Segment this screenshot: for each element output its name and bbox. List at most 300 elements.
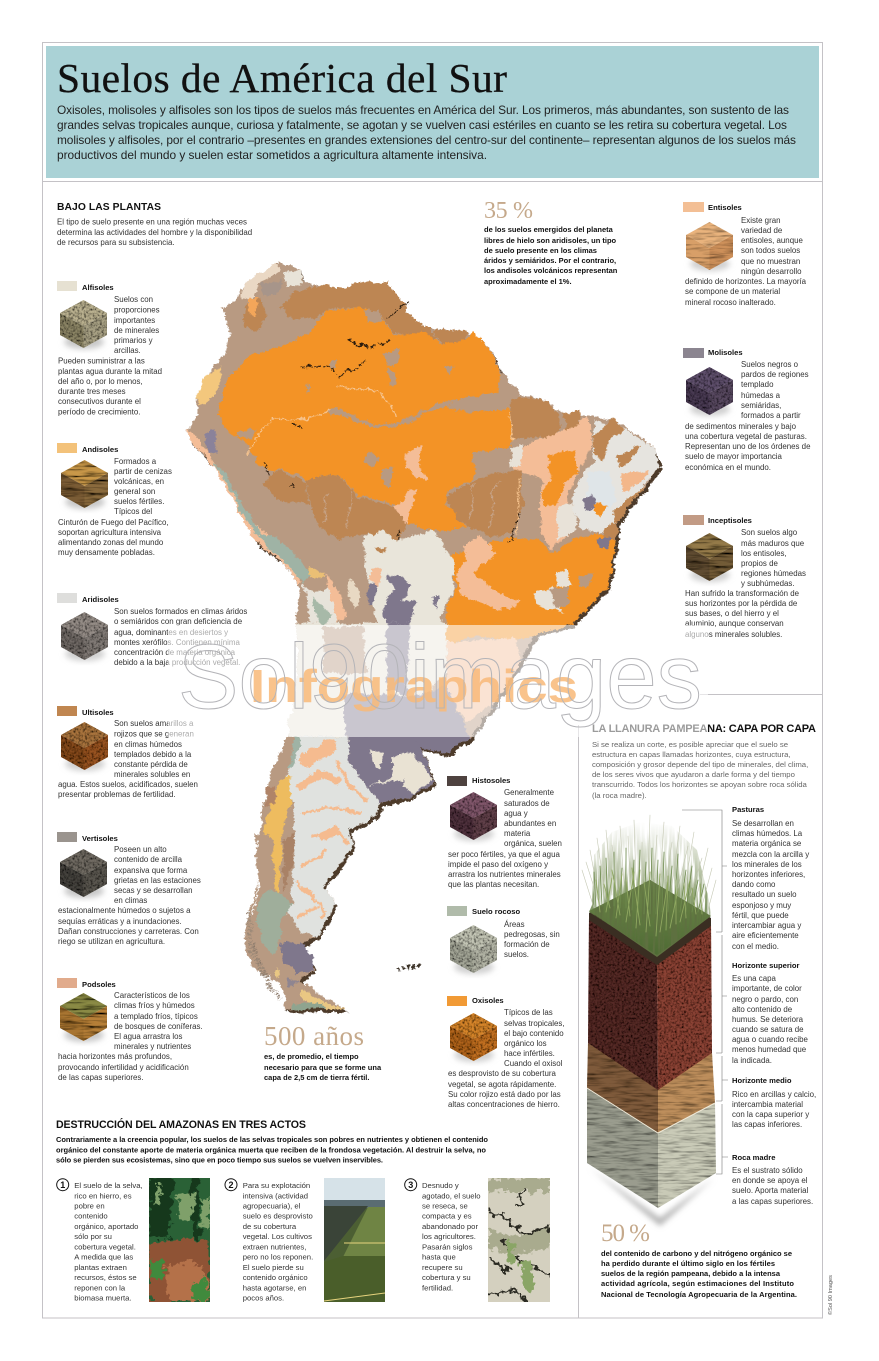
soil: podsoles: Podsoles <box>82 980 116 989</box>
section: destrucción del Amazonas: sólo se pierden sus ecosistemas, sino que en poco tiempo sus suelos se vuelven inservibles. <box>56 1156 383 1164</box>
step 2: pocos años. <box>243 1294 284 1302</box>
section: llanura pampeana: LA LLANURA PAMPEANA: CAPA POR CAPA <box>592 723 816 735</box>
soil: podsoles: de las capas superiores. <box>58 1073 144 1082</box>
soil: molisoles: Representan uno de los órdenes de <box>685 442 811 451</box>
soil: entisoles: que no muestran <box>741 257 800 266</box>
soil: vertisoles: grietas en las estaciones <box>114 876 201 885</box>
step 2: extraen nutrientes, <box>243 1242 306 1251</box>
soil: inceptisoles: algunos minerales solubles. <box>685 630 782 639</box>
layer: pasturas: Pasturas <box>732 805 764 814</box>
step 3: los agricultores. <box>422 1232 476 1241</box>
layer: horizonte superior: importante, de color <box>732 984 802 993</box>
coastal entisoles and rocky strip <box>187 430 300 587</box>
layer: pasturas: fértil, que puede <box>732 911 789 920</box>
soil: aridisoles: Son suelos formados en climas áridos <box>114 607 247 616</box>
soil: podsoles: minerales y nutrientes <box>114 1042 191 1051</box>
oxisoles south-east area <box>447 533 617 625</box>
step 2: contenido orgánico <box>243 1273 308 1282</box>
soil: andisoles: Formados a <box>114 457 157 466</box>
step 3: 3 <box>408 1180 413 1190</box>
soil: histosoles: ser poco fértiles, ya que el agua <box>448 850 560 859</box>
step 3: hasta que <box>422 1253 456 1262</box>
soil: oxisoles: orgánico los <box>504 1039 547 1048</box>
layer: horizonte medio: con la capa superior y <box>732 1110 809 1119</box>
subsoil layer <box>587 1043 715 1133</box>
soil: aridisoles: debido a la baja producción vegetal. <box>114 658 240 667</box>
soil: histosoles: abundantes en <box>504 819 556 828</box>
stat: 35 %: libres de hielo son aridisoles, un tipo <box>484 236 617 245</box>
soil: alfisoles: Alfisoles <box>82 283 114 292</box>
soil: oxisoles: hace infértiles. <box>504 1049 555 1058</box>
layer: horizonte medio: las capas inferiores. <box>732 1120 802 1129</box>
soil: entisoles: se compone de un material <box>685 287 780 296</box>
soil: andisoles <box>57 443 172 557</box>
rivers <box>248 303 520 543</box>
soil: alfisoles: durante tres meses <box>58 387 126 396</box>
layer: roca madre: suelo. Aporta material <box>732 1186 809 1195</box>
soil: molisoles: semiáridas, <box>741 401 781 410</box>
heading: bajo las plantas: determina las actividades del hombre y la disponibilidad <box>57 228 252 237</box>
soil: vertisoles: sequías erráticas y a inundaciones. <box>58 917 182 926</box>
soil: ultisoles: en climas húmedos <box>114 740 182 749</box>
step 2: Para su explotación <box>243 1181 310 1190</box>
cube: aridisoles <box>61 612 108 661</box>
stat: 35 %: 35 % <box>484 198 533 224</box>
section: llanura pampeana: transcurrido. Todos los horizontes se apoyan sobre roca sólida <box>592 780 808 789</box>
layer: pasturas: aire eficientemente <box>732 931 799 940</box>
cube: ultisoles <box>61 722 108 771</box>
soil: suelo rocoso: pedregosas, sin <box>504 930 560 939</box>
photo: cultivo <box>324 1178 385 1302</box>
step 1: plantas extraen <box>74 1263 127 1272</box>
soil: inceptisoles: regiones húmedas <box>741 569 806 578</box>
watermark: Sol90images: Sol90images <box>178 626 702 728</box>
soil: entisoles: Existe gran <box>741 216 780 225</box>
heading: bajo las plantas: BAJO LAS PLANTAS <box>57 202 161 213</box>
soil: suelo rocoso: formación de <box>504 940 550 949</box>
soil: andisoles: Típicos del <box>114 507 152 516</box>
map shadow <box>189 265 661 1013</box>
title: Suelos de América del Sur <box>57 55 507 101</box>
step 1: sólo por su <box>74 1232 112 1241</box>
step 1: rico en hierro, es <box>74 1191 132 1200</box>
soil: histosoles: Histosoles <box>472 776 510 785</box>
soil: oxisoles: Oxisoles <box>472 996 504 1005</box>
soil: inceptisoles: y subhúmedas. <box>741 579 795 588</box>
stat: 35 %: los andisoles volcánicos representan <box>484 266 618 275</box>
soil: ultisoles <box>57 706 198 799</box>
soil: entisoles: variedad de <box>741 226 783 235</box>
soil: molisoles <box>683 348 811 472</box>
soil: andisoles: alimentando zonas del mundo <box>58 538 164 547</box>
layer: roca madre: en donde se apoya el <box>732 1176 808 1185</box>
layer: horizonte superior: menos humedad que <box>732 1045 807 1054</box>
step 2: hasta agotarse, en <box>243 1283 306 1292</box>
soil: vertisoles: Vertisoles <box>82 834 118 843</box>
stat: 35 %: de los suelos emergidos del planeta <box>484 225 614 234</box>
soil: histosoles: materia <box>504 829 531 838</box>
layer: roca madre: a las capas superiores. <box>732 1197 813 1206</box>
soil: alfisoles: del año o, por lo menos, <box>58 377 143 386</box>
soil: alfisoles: arcillas. <box>114 346 141 355</box>
layer: pasturas: Se desarrollan en <box>732 819 794 828</box>
soil: podsoles: hacia horizontes más profundos, <box>58 1052 172 1061</box>
step 2 <box>225 1178 385 1302</box>
step 3: Desnudo y <box>422 1181 459 1190</box>
soil: alfisoles: primarios y <box>114 336 153 345</box>
ultisoles areas <box>243 282 560 542</box>
step 3: recupere su <box>422 1263 463 1272</box>
stone layer <box>587 1088 716 1208</box>
step 3 <box>405 1178 550 1302</box>
cube: alfisoles <box>60 300 107 349</box>
southern cone soils <box>248 623 573 1010</box>
soil: oxisoles <box>447 996 565 1109</box>
stat: 50 %: 50 % <box>601 1220 650 1247</box>
cube: oxisoles <box>450 1013 497 1062</box>
soil: histosoles: Generalmente <box>504 788 555 797</box>
soil: histosoles: saturados de <box>504 799 550 808</box>
soil: oxisoles: altas concentraciones de hierro. <box>448 1100 560 1109</box>
layer: horizonte medio <box>732 1076 816 1129</box>
soil: histosoles: que las plantas necesitan. <box>448 880 539 889</box>
soil: oxisoles: Su color rojizo está dado por las <box>448 1090 561 1099</box>
heading: bajo las plantas <box>57 202 252 247</box>
stat: 35 %: áridos y semiáridos. Por el contrario, <box>484 256 616 265</box>
soil: podsoles: Característicos de los <box>114 991 190 1000</box>
layer: horizonte medio: intercambia material <box>732 1100 803 1109</box>
step 3: compacta y es <box>422 1212 472 1221</box>
soil: inceptisoles: propios de <box>741 559 778 568</box>
soil: oxisoles: Típicos de las <box>504 1008 553 1017</box>
soil: vertisoles <box>57 832 201 946</box>
heading: bajo las plantas: El tipo de suelo presente en una región muchas veces <box>57 218 247 226</box>
soil: histosoles: orgánica, suelen <box>504 839 562 848</box>
soil: entisoles: definido de horizontes. La mayoría <box>685 277 807 286</box>
soil: andisoles: general son <box>114 487 155 496</box>
layer: horizonte superior: negro o pardo, con <box>732 995 798 1004</box>
soil: inceptisoles: aluminio, aunque conservan <box>685 619 784 628</box>
soil: ultisoles: Son suelos amarillos a <box>114 719 194 728</box>
step 1: El suelo de la selva, <box>74 1181 143 1190</box>
soil: oxisoles: el bajo contenido <box>504 1029 564 1038</box>
intro text: grandes selvas tropicales aunque, curiosa y fatalmente, se agotan y se vuelven casi estériles en cuanto se les retira su cobertura vegetal. Los <box>57 118 787 132</box>
layer: pasturas <box>732 805 809 951</box>
layer: horizonte medio: Horizonte medio <box>732 1076 792 1085</box>
soil: podsoles: a templado fríos, típicos <box>114 1012 198 1021</box>
section: destrucción del Amazonas: Contrariamente a la creencia popular, los suelos de las selvas tropicales son pobres en nutrientes y obtienen el contenido <box>56 1135 488 1144</box>
soil profile block <box>582 815 716 1226</box>
layer: roca madre <box>732 1153 813 1206</box>
layer: horizonte medio: Rico en arcillas y calcio, <box>732 1090 816 1099</box>
soil: alfisoles: consecutivos durante el <box>58 397 141 406</box>
soil: oxisoles: selvas tropicales, <box>504 1019 565 1028</box>
stat: 50 % <box>601 1220 797 1299</box>
step 2: agropecuaria), el <box>243 1202 301 1210</box>
soil: andisoles: Andisoles <box>82 445 118 454</box>
stat: 35 %: de suelo presente en los climas <box>484 246 597 255</box>
soil: entisoles: Entisoles <box>708 203 742 212</box>
step 1: pobre en <box>74 1202 105 1210</box>
layer: pasturas: esponjoso y muy <box>732 901 791 910</box>
layer: roca madre: Es el sustrato sólido <box>732 1166 803 1175</box>
soil: vertisoles: Dañan construcciones y carreteras. Con <box>58 927 199 936</box>
soil: entisoles: mineral rocoso inalterado. <box>685 298 776 307</box>
step 3: agotado, el suelo <box>422 1191 481 1200</box>
soil: molisoles: templado <box>741 380 774 389</box>
soil: ultisoles: constante pérdida de <box>114 760 188 769</box>
stat: 50 %: suelos de la región pampeana, debido a la intensa <box>601 1269 781 1278</box>
turf <box>589 880 711 965</box>
soil: histosoles <box>447 776 562 889</box>
soil: andisoles: soportan agricultura intensiva <box>58 528 162 537</box>
layer: pasturas: dando como <box>732 880 776 889</box>
soil: andisoles: Cinturón de Fuego del Pacífico, <box>58 518 169 527</box>
photo: suelo agrietado <box>488 1178 550 1302</box>
soil: ultisoles: minerales solubles en <box>114 770 190 779</box>
stat: 50 %: Nacional de Tecnología Agropecuaria de la Argentina. <box>601 1290 797 1299</box>
soil: inceptisoles: Inceptisoles <box>708 516 752 525</box>
soil: vertisoles: Poseen un alto <box>114 845 167 854</box>
soil: aridisoles: o semiáridos con gran deficiencia de <box>114 617 243 626</box>
soil: entisoles <box>683 202 807 307</box>
credit: ©Sol 90 Images <box>827 1275 834 1315</box>
soil: aridisoles: concentración de materia orgánica <box>114 648 236 657</box>
soil: molisoles: Suelos negros o <box>741 360 799 369</box>
section: destrucción del Amazonas: DESTRUCCIÓN DEL AMAZONAS EN TRES ACTOS <box>56 1118 306 1131</box>
soil: podsoles: climas fríos y húmedos <box>114 1001 195 1010</box>
step 3: Pasarán siglos <box>422 1242 473 1251</box>
Falkland islands <box>397 966 422 970</box>
soil: molisoles: formados a partir <box>741 411 801 420</box>
step 2: El suelo pierde su <box>243 1263 304 1272</box>
stat: 500 años: necesario para que se forme una <box>264 1063 382 1072</box>
step 2: intensiva (actividad <box>243 1191 308 1200</box>
cube: molisoles <box>686 367 733 416</box>
layer: pasturas: mezcla con la arcilla y <box>732 850 809 859</box>
soil: molisoles: húmedas a <box>741 391 781 400</box>
intro text: molisoles y alfisoles, por el contrario –presentes en grandes extensiones del centro-sur del continente– representan algunos de los suelos más <box>57 133 796 147</box>
layer: pasturas: con el medio. <box>732 942 779 951</box>
step 1: 1 <box>60 1180 65 1190</box>
soil: inceptisoles: más maduros que <box>741 539 805 548</box>
soil: entisoles: ningún desarrollo <box>741 267 802 276</box>
soil: ultisoles: templados debido a la <box>114 750 192 759</box>
soil: oxisoles: es desprovisto de su cobertura <box>448 1069 557 1078</box>
section: llanura pampeana: (la roca madre). <box>592 791 647 800</box>
soil: molisoles: económica en el mundo. <box>685 463 771 472</box>
step 2: vegetal. Los cultivos <box>243 1232 312 1241</box>
stat: 50 %: actividad agrícola, según estimaciones del Instituto <box>601 1279 794 1288</box>
soil: alfisoles: período de crecimiento. <box>58 408 140 416</box>
layer: horizonte superior: la indicada. <box>732 1056 772 1065</box>
inceptisol blobs inside Amazon <box>237 311 490 487</box>
soil: ultisoles: presentar problemas de fertilidad. <box>58 790 176 799</box>
block shadow <box>590 1168 714 1226</box>
soil: aridisoles: montes xerófilos. Contienen mínima <box>114 638 240 647</box>
soil: podsoles: de bosques de coníferas. <box>114 1022 203 1031</box>
soil: suelo rocoso <box>447 906 560 974</box>
cube: podsoles <box>60 993 107 1042</box>
east: entisoles and aridisoles <box>510 412 658 613</box>
soil: alfisoles: plantas agua durante la mitad <box>58 367 162 376</box>
soil: vertisoles: contenido de arcilla <box>114 855 183 864</box>
soil: ultisoles: rojizos que se generan <box>114 730 194 738</box>
soil: vertisoles: riego se utilizan en agricultura. <box>58 937 165 946</box>
step 1: recursos, éstos se <box>74 1273 137 1282</box>
stat: 35 %: aproximadamente el 1%. <box>484 277 572 286</box>
step 2: de su cobertura <box>243 1222 297 1231</box>
step 1: contenido <box>74 1212 108 1221</box>
layer: pasturas: resultado un suelo <box>732 890 797 899</box>
step 3: se reseca, se <box>422 1202 468 1210</box>
layer: horizonte superior: humus. Se deteriora <box>732 1015 804 1024</box>
soil: alfisoles: de minerales <box>114 326 159 335</box>
soil: inceptisoles: los entisoles, <box>741 549 787 558</box>
soil: suelo rocoso: Áreas <box>504 920 525 929</box>
soil: alfisoles: Pueden suministrar a las <box>58 356 145 366</box>
section: llanura pampeana: de los seres vivos que ayudaron a darle forma y del tiempo <box>592 770 795 779</box>
stat: 50 %: del contenido de carbono y del nitrógeno orgánico se <box>601 1249 792 1258</box>
soil: molisoles: una cobertura vegetal de pasturas. <box>685 432 807 441</box>
header panel <box>46 46 819 178</box>
section: llanura pampeana: estructura en capas llamadas horizontes, cuya estructura, <box>592 750 791 759</box>
soil: molisoles: suelo de mayor importancia <box>685 452 783 461</box>
layer: pasturas: intercambiar agua y <box>732 921 801 930</box>
cube: suelo rocoso <box>450 925 497 974</box>
soil: alfisoles: Suelos con <box>114 295 153 304</box>
step 1: biomasa muerta. <box>74 1294 132 1302</box>
step 2: 2 <box>228 1180 234 1190</box>
Andean andisoles and Peru molisoles <box>197 367 222 407</box>
watermark: Infographics: Infographics <box>250 660 578 712</box>
cube: vertisoles <box>60 849 107 898</box>
layer: horizonte superior: cuando se satura de <box>732 1025 804 1034</box>
soil: oxisoles: Cuando el oxisol <box>504 1059 563 1068</box>
step 3: abandonado por <box>422 1222 478 1231</box>
topsoil layer <box>588 917 712 1090</box>
grass mass <box>589 822 711 955</box>
soil: inceptisoles: Son suelos algo <box>741 528 798 537</box>
soil: aridisoles: agua, dominantes en desiertos y <box>114 628 228 637</box>
cube: histosoles <box>450 792 497 841</box>
soil: inceptisoles: sus horizontes por la pérdida de <box>685 599 798 608</box>
northern Caribbean soils <box>240 263 303 317</box>
stat: 35 % <box>484 198 618 286</box>
photo: selva <box>149 1178 210 1302</box>
section: llanura pampeana <box>582 723 816 1299</box>
soil: ultisoles: agua. Estos suelos, acidificados, suelen <box>58 780 198 789</box>
soil: vertisoles: estacionalmente húmedos o sujetos a <box>58 906 191 915</box>
step 1: cobertura vegetal. <box>74 1242 136 1251</box>
step 1: A medida que las <box>74 1253 133 1262</box>
stat: 500 años <box>264 1021 382 1082</box>
soil: vertisoles: en climas <box>114 896 147 905</box>
section: llanura pampeana: composición y grosor depende del tipo de minerales, del clima, <box>592 760 808 769</box>
intro text <box>57 103 796 162</box>
stat: 500 años: 500 años <box>264 1021 364 1051</box>
soil: alfisoles <box>57 281 162 416</box>
layer: pasturas: los minerales de los <box>732 860 802 869</box>
soil: inceptisoles: sus bases, o del hierro y el <box>685 609 779 618</box>
stat: 500 años: es, de promedio, el tiempo <box>264 1052 359 1061</box>
step 3: cobertura y su <box>422 1273 471 1282</box>
soil: oxisoles: vegetal, se agota rápidamente. <box>448 1080 556 1089</box>
step 1: orgánico, aportado <box>74 1222 138 1231</box>
layer: horizonte superior: Horizonte superior <box>732 961 800 970</box>
soil: molisoles: pardos de regiones <box>741 370 809 379</box>
oxisoles main Amazon area <box>218 308 513 530</box>
soil: andisoles: suelos fértiles. <box>114 497 164 506</box>
layer: roca madre: Roca madre <box>732 1153 775 1162</box>
layer: horizonte superior: alto contenido de <box>732 1005 793 1014</box>
cube: entisoles <box>686 222 733 271</box>
soil: inceptisoles <box>683 515 806 639</box>
soil: aridisoles: Aridisoles <box>82 595 119 604</box>
step 2: pero no los reponen. <box>243 1253 313 1262</box>
section: llanura pampeana: Si se realiza un corte, es posible apreciar que el suelo se <box>592 740 788 749</box>
heading: bajo las plantas: de recursos para su subsistencia. <box>57 238 175 247</box>
cube: inceptisoles <box>686 533 733 582</box>
step 3: fertilidad. <box>422 1283 453 1292</box>
step 1 <box>57 1178 210 1302</box>
soil: molisoles: Molisoles <box>708 348 743 357</box>
central alfisoles and molisoles <box>303 445 520 627</box>
section: destrucción del Amazonas <box>56 1118 550 1302</box>
intro text: Oxisoles, molisoles y alfisoles son los tipos de suelos más frecuentes en América del Sur. Los primeros, más abundantes, son sustento de las <box>57 103 789 117</box>
layer brackets <box>682 810 728 1174</box>
soil: vertisoles: expansiva que forma <box>114 866 188 875</box>
soil: suelo rocoso: Suelo rocoso <box>472 907 520 916</box>
soil: alfisoles: importantes <box>114 316 155 325</box>
soil: entisoles: entisoles, aunque <box>741 236 803 245</box>
soil: podsoles <box>57 978 203 1082</box>
layer: horizonte superior <box>732 961 809 1065</box>
soil: histosoles: agua y <box>504 809 528 818</box>
soil: histosoles: arrastra los nutrientes minerales <box>448 870 561 879</box>
soil: molisoles: de sedimentos minerales y bajo <box>685 422 797 431</box>
soil: podsoles: El agua arrastra los <box>114 1032 182 1041</box>
soil: alfisoles: proporciones <box>114 306 160 314</box>
step 1: reponen con la <box>74 1283 126 1292</box>
layer: horizonte superior: Es una capa <box>732 974 776 983</box>
soil: vertisoles: secas y se desarrollan <box>114 886 193 895</box>
layer: pasturas: climas húmedos. La <box>732 829 803 838</box>
step 2: suelo es desprovisto <box>243 1212 313 1221</box>
soil: suelo rocoso: suelos. <box>504 950 529 959</box>
section: destrucción del Amazonas: orgánico del constante aporte de materia orgánica muerta que reciben de la frondosa vegetación. Al destruir la selva, no <box>56 1146 486 1154</box>
layer: pasturas: horizontes inferiores, <box>732 870 805 879</box>
map base: inceptisoles <box>187 262 658 1010</box>
soil: entisoles: son todos suelos <box>741 246 800 255</box>
soil: ultisoles: Ultisoles <box>82 708 114 717</box>
intro text: productivos del mundo y suelen estar sometidos a agricultura altamente intensiva. <box>57 148 487 162</box>
soil: andisoles: partir de cenizas <box>114 467 172 476</box>
soil: aridisoles <box>57 593 247 667</box>
map of South America <box>187 262 661 1013</box>
stat: 500 años: capa de 2,5 cm de tierra fértil. <box>264 1073 369 1082</box>
watermark band <box>168 625 708 737</box>
stat: 50 %: ha perdido durante el último siglo en los fértiles <box>601 1259 775 1268</box>
layer: horizonte superior: agua o cuando recibe <box>732 1035 809 1044</box>
soil: andisoles: muy densamente pobladas. <box>58 548 155 557</box>
soil: inceptisoles: Han sufrido la transformación de <box>685 589 800 598</box>
cube: andisoles <box>61 460 108 509</box>
soil: andisoles: volcánicas, en <box>114 477 164 486</box>
grass <box>582 815 716 936</box>
soil: podsoles: provocando infertilidad y acidificación <box>58 1063 189 1072</box>
soil: histosoles: impide el paso del oxígeno y <box>448 860 548 869</box>
